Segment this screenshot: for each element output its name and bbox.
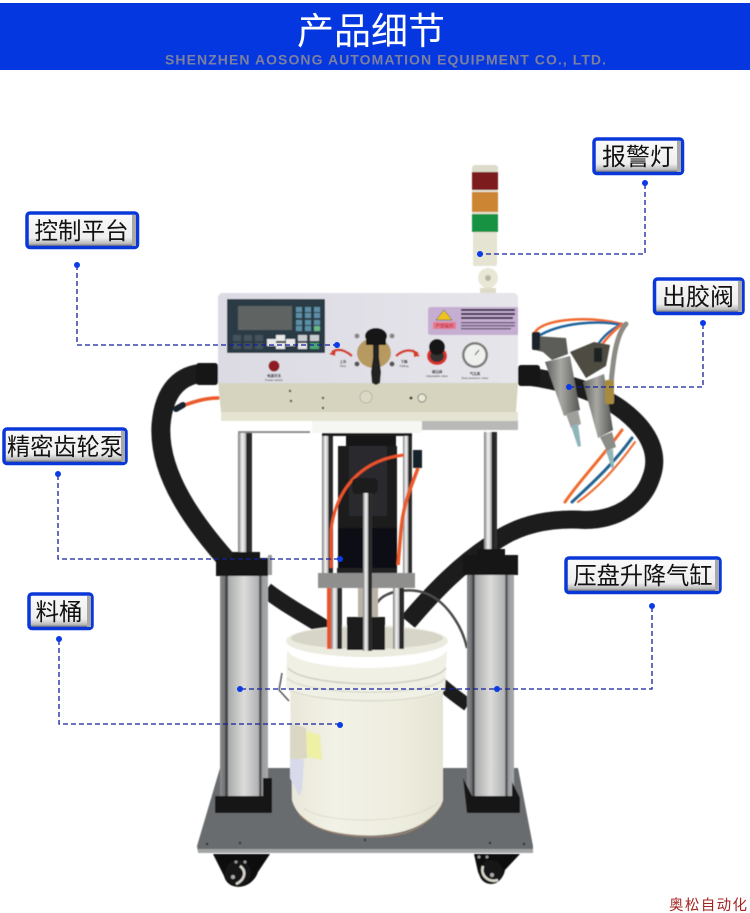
power switch: Power switch [265, 378, 283, 382]
control panel housing [218, 293, 518, 436]
grey sensor cable [377, 590, 467, 648]
power switch [265, 360, 283, 382]
header banner [0, 1, 750, 70]
corrugated hoses [161, 373, 654, 705]
callout dots [55, 180, 706, 728]
pressure regulator [426, 339, 448, 378]
warning sticker: 严禁操作 [436, 322, 454, 330]
machine photo illustration [161, 165, 654, 887]
right lifting rod [484, 432, 497, 560]
subtitle: SHENZHEN AOSONG AUTOMATION EQUIPMENT CO., LTD. [165, 52, 606, 68]
pressure gauge: Seal pressure meter [461, 376, 489, 380]
warning sticker [428, 307, 518, 335]
pressure gauge [461, 342, 489, 380]
right caster [474, 854, 520, 884]
material bucket [279, 625, 448, 837]
base plate [197, 768, 533, 853]
label: platen lift cylinder: 压盘升降气缸 [574, 556, 712, 591]
lift rotary valve: 上升 [340, 359, 347, 365]
label: alarm light: 报警灯 [602, 137, 674, 172]
right air cylinder [463, 549, 520, 813]
label: control platform: 控制平台 [34, 212, 128, 246]
label: precision gear pump: 精密齿轮泵 [7, 427, 123, 462]
pressure gauge: 气压表 [470, 371, 481, 377]
pressure regulator: 调压阀 [432, 369, 443, 375]
power switch: 电源开关 [267, 373, 281, 379]
label: material bucket: 料桶 [36, 593, 82, 627]
left caster [213, 854, 270, 887]
central pump assembly [318, 432, 422, 650]
HMI touch controller [227, 299, 325, 353]
left lifting rod [238, 432, 252, 560]
lift rotary valve [329, 328, 420, 385]
callout lines [58, 184, 703, 724]
left air cylinder [215, 552, 272, 813]
hose connectors [196, 363, 540, 386]
orange and blue air tubes [176, 319, 635, 502]
pump rods in bucket [327, 493, 404, 651]
pressure regulator: Adjustable valve [426, 374, 448, 378]
label: dispensing valve: 出胶阀 [662, 277, 734, 312]
signal tower light [472, 165, 498, 294]
lift rotary valve: Rise [340, 364, 346, 368]
lift rotary valve: 下降 [400, 359, 408, 365]
dispensing valves [532, 332, 616, 469]
lift rotary valve: Falling [400, 364, 409, 368]
title: 产品细节 [297, 1, 445, 55]
